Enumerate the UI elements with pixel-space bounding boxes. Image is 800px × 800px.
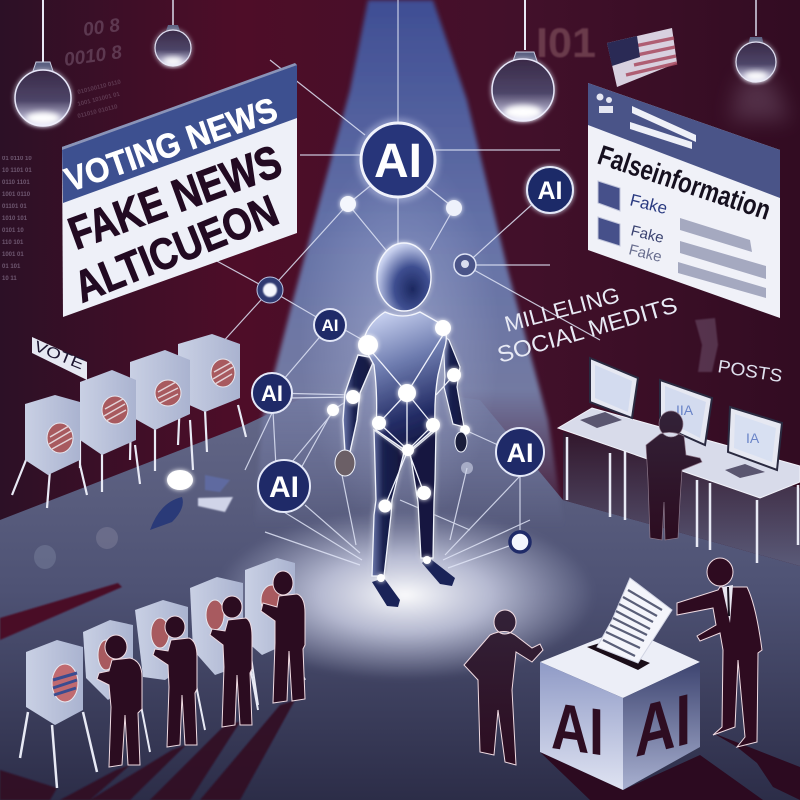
hanging lamp 3: [492, 0, 554, 121]
person at computer: [646, 411, 702, 540]
small network nodes: [257, 196, 530, 552]
misleading social media caption: SOCIAL MEDITS: [494, 292, 680, 368]
dim data text at left edge: 10 11: [2, 276, 17, 282]
voter 3: [210, 596, 252, 727]
dim digits at top centre: I01: [536, 19, 596, 66]
dim data text at left edge: [2, 156, 32, 282]
dim binary text on wall: 0010 8: [63, 42, 124, 71]
back row voting booths: [12, 334, 246, 508]
foreground booth shadows: [0, 700, 295, 800]
desk legs: [567, 437, 798, 563]
AI node upper right: [527, 167, 573, 213]
back booth 3: [130, 350, 193, 471]
foreground voting booth 5: [245, 558, 305, 705]
foreground voting booth 4: [190, 577, 258, 710]
list item bars: [678, 218, 766, 298]
figure right leg: [410, 430, 436, 558]
hanging lamp 2: [155, 0, 191, 66]
large AI node: [356, 118, 440, 202]
browser panel false information: [588, 83, 780, 318]
dim data text at left edge: 0110 1101: [2, 180, 30, 186]
dim data text at left edge: 01 101: [2, 264, 21, 270]
floor: [0, 380, 800, 800]
american flag: [607, 28, 677, 87]
ballot box right face: [623, 662, 700, 790]
AI node upper right: AI: [538, 177, 562, 205]
dim binary text on wall: 00 8: [82, 15, 122, 41]
AI node lower left: AI: [269, 471, 299, 504]
foreground voting booth 1: [20, 640, 97, 788]
list item text: Fake: [628, 190, 669, 218]
figure head: [377, 243, 431, 311]
AI node mid left: [314, 309, 346, 341]
AI node lower right: [496, 428, 544, 476]
ballot slot: [587, 643, 650, 670]
AI node left: [252, 373, 292, 413]
vote sign: VOTE: [32, 338, 86, 373]
back booth 1: [12, 395, 87, 508]
monitor 3: [728, 407, 782, 470]
figure joints and wiring: [346, 320, 470, 582]
figure right hand: [455, 432, 467, 452]
dim data text at left edge: 01101 01: [2, 204, 27, 210]
AI node mid left: AI: [322, 316, 338, 335]
browser title bars: [630, 106, 696, 149]
figure torso: [363, 312, 446, 452]
voter 1: [97, 635, 142, 767]
monitor 2: [660, 380, 712, 445]
figure right arm: [443, 335, 464, 427]
dim binary text on wall: 010100110 0110: [77, 79, 122, 96]
voter 2: [153, 616, 197, 747]
news billboard: [60, 63, 297, 317]
floor debris: [34, 470, 233, 569]
ballot box top: [540, 628, 700, 698]
billboard headline: fake news: FAKE NEWS: [62, 135, 288, 259]
central humanoid figure: [335, 243, 470, 607]
AI node lower right: AI: [506, 438, 534, 468]
figure left leg: [372, 430, 404, 576]
hanging lamp 4: [730, 0, 790, 120]
ballot box left face: [540, 662, 623, 790]
list item text: Fake: [627, 241, 664, 266]
dim data text at left edge: 1001 01: [2, 252, 24, 258]
back booth 2: [80, 370, 140, 492]
ballot box right face: AI: [635, 678, 691, 772]
misleading social media caption: MILLELING: [502, 282, 622, 337]
billboard headline: voting news: VOTING NEWS: [60, 91, 282, 200]
spotlight beam: [250, 0, 575, 600]
shirt and tie: [722, 585, 733, 623]
dim binary text on wall: 011010 010110: [77, 104, 119, 120]
browser window dots: [596, 94, 613, 113]
dim data text at left edge: 0101 10: [2, 228, 24, 234]
ballot box shadow: [540, 752, 763, 800]
foreground voting booth 2: [83, 620, 150, 752]
dim data text at left edge: 10 1101 01: [2, 168, 32, 174]
list item text: Fake: [629, 222, 666, 247]
back booth 4: [178, 334, 246, 452]
network connection lines: [215, 0, 600, 568]
dim binary text on wall: 1001 101001 01: [77, 91, 121, 108]
AI node lower left: [258, 460, 310, 512]
billboard headline: garbled word: ALTICUEON: [67, 186, 285, 312]
monitor 1: [590, 358, 638, 418]
ballot paper: [597, 578, 672, 663]
figure left arm: [343, 355, 375, 452]
dim data text at left edge: 110 101: [2, 240, 24, 246]
computer desks: [558, 358, 800, 563]
foreground voting booth 3: [135, 600, 205, 730]
person left of ballot box: [464, 610, 543, 765]
vote sign: [32, 337, 87, 380]
AI ballot box: [540, 578, 700, 790]
keyboards: [580, 412, 765, 478]
floor seam shadow: [0, 583, 122, 640]
ballot box left face: AI: [551, 689, 604, 770]
person right of ballot box: [677, 558, 762, 747]
monitor 2: IIA: [676, 402, 694, 418]
hanging lamp 1: [15, 0, 71, 126]
light pool on floor: [215, 510, 595, 680]
under-desk shade: [563, 432, 800, 566]
standing person shadow: [713, 733, 800, 800]
dim data text at left edge: 1001 0110: [2, 192, 31, 198]
faint silhouette near posts: [695, 318, 718, 372]
dim data text at left edge: 1010 101: [2, 216, 28, 222]
list thumbnails: [598, 181, 620, 246]
desk surface: [558, 408, 800, 498]
posts caption: POSTS: [716, 356, 784, 386]
figure feet: [372, 557, 455, 607]
large AI node: AI: [374, 135, 422, 188]
AI node left: AI: [261, 381, 283, 406]
list item text: [627, 190, 669, 266]
figure left hand: [335, 450, 355, 476]
monitor 3: IA: [746, 430, 760, 446]
dim binary text on wall: [63, 15, 124, 120]
voter 4: [261, 571, 305, 703]
dim data text at left edge: 01 0110 10: [2, 156, 32, 162]
